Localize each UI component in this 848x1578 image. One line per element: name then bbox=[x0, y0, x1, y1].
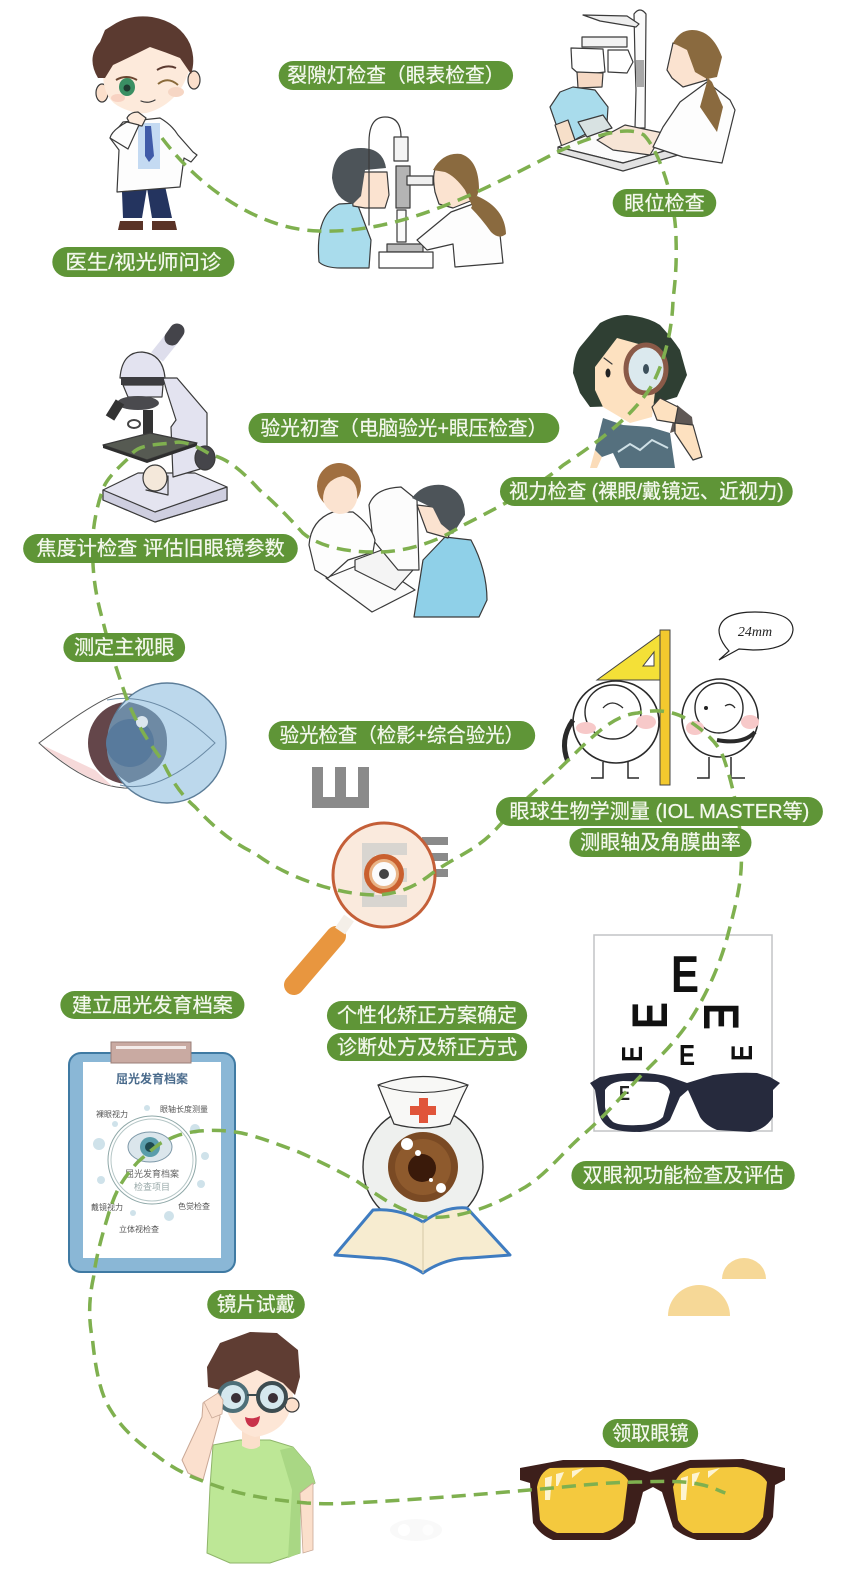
left eye character bbox=[564, 681, 659, 778]
right arm bbox=[300, 1483, 313, 1553]
shoes bbox=[118, 221, 143, 230]
step label: 个性化矫正方案确定 bbox=[327, 1001, 527, 1030]
eye chart board: E bbox=[679, 1040, 695, 1072]
nurse ponytail bbox=[700, 78, 723, 132]
eye chart board bbox=[594, 935, 772, 1131]
patient shirt bbox=[550, 87, 608, 140]
paper items: 色觉检查 bbox=[178, 1201, 210, 1211]
handle bbox=[294, 936, 336, 985]
focus knob bbox=[195, 446, 215, 470]
paper items: 裸眼视力 bbox=[96, 1109, 128, 1119]
blush bbox=[168, 87, 184, 97]
step label: 医生/视光师问诊 bbox=[52, 247, 234, 277]
hair bbox=[207, 1332, 300, 1395]
magnifier bbox=[626, 345, 666, 393]
objectives bbox=[110, 402, 120, 418]
trousers bbox=[122, 172, 172, 218]
patient shirt bbox=[318, 203, 371, 268]
step label: 领取眼镜 bbox=[603, 1419, 698, 1448]
left arm bbox=[590, 450, 602, 468]
eye and nose bbox=[606, 368, 610, 378]
step label: 镜片试戴: 镜片试戴 bbox=[217, 1293, 295, 1316]
paper items: 立体视检查 bbox=[119, 1224, 159, 1234]
illustration: doctor winking bbox=[92, 16, 200, 230]
central rings: 检查项目 bbox=[134, 1181, 170, 1192]
nurse coat bbox=[309, 512, 375, 578]
dashed route connecting all steps bbox=[90, 131, 741, 1504]
eye chart board: E bbox=[726, 1045, 759, 1061]
illustration: magnifier with eye bbox=[294, 823, 435, 985]
table bbox=[558, 130, 685, 163]
step label: 领取眼镜: 领取眼镜 bbox=[612, 1422, 689, 1445]
contact lens bbox=[108, 683, 226, 803]
base bbox=[103, 473, 227, 522]
shirt bbox=[595, 418, 675, 468]
lens highlights bbox=[545, 1468, 584, 1500]
eyeball bbox=[363, 1107, 483, 1227]
hair bbox=[573, 315, 687, 407]
step label: 镜片试戴 bbox=[207, 1290, 305, 1319]
nurse hair bbox=[673, 30, 722, 79]
illustration: eye position examination bbox=[550, 10, 735, 171]
paper items bbox=[91, 1104, 210, 1234]
decoration: sun semicircles bbox=[668, 1258, 766, 1316]
step label: 双眼视功能检查及评估: 双眼视功能检查及评估 bbox=[582, 1164, 784, 1187]
illustration: boy trying lenses bbox=[182, 1332, 315, 1563]
nurse face bbox=[667, 43, 707, 87]
board bbox=[69, 1053, 235, 1272]
central rings bbox=[108, 1116, 196, 1204]
frame bbox=[520, 1459, 785, 1540]
nurse head bbox=[434, 166, 473, 208]
illustration: refraction record clipboard bbox=[69, 1042, 235, 1272]
winking eye bbox=[158, 80, 178, 85]
face bbox=[222, 1360, 293, 1437]
triangle ruler bbox=[597, 633, 662, 680]
patient face and hair bbox=[350, 172, 389, 208]
nosepiece bbox=[117, 396, 159, 410]
lens bbox=[333, 823, 435, 927]
step label: 验光初查: 验光初查（电脑验光+眼压检查） bbox=[261, 417, 547, 440]
eye chart board: E bbox=[693, 1003, 749, 1030]
step label: 验光初查 bbox=[248, 413, 559, 443]
instrument pole bbox=[634, 10, 646, 128]
face bbox=[595, 338, 660, 423]
illustration: measuring eye characters with ruler bbox=[564, 630, 759, 785]
hand bbox=[204, 1393, 223, 1418]
step label: 眼位检查: 眼位检查 bbox=[624, 192, 705, 215]
speech bubble: 24mm: 24mm bbox=[738, 625, 772, 640]
phoropter bbox=[582, 37, 627, 47]
lower lid tint bbox=[42, 745, 112, 786]
icon: grey E chart letter bbox=[422, 837, 448, 877]
mouth bbox=[245, 1416, 260, 1427]
paper items: 眼轴长度测量 bbox=[160, 1104, 208, 1114]
eye chart board: E bbox=[617, 1046, 649, 1062]
lens iris overlap bbox=[107, 702, 167, 783]
eye outline bbox=[39, 694, 215, 788]
eye chart board: E bbox=[671, 946, 699, 1004]
shirt shading bbox=[280, 1447, 315, 1558]
step label: 诊断处方及矫正方式: 诊断处方及矫正方式 bbox=[337, 1036, 517, 1059]
clear left lens bbox=[605, 1081, 670, 1125]
step label: 验光检查: 验光检查（检影+综合验光） bbox=[280, 724, 524, 747]
step label: 测定主视眼: 测定主视眼 bbox=[74, 636, 175, 659]
ears bbox=[96, 84, 108, 102]
nurse cap bbox=[378, 1076, 468, 1128]
eye rings bbox=[364, 854, 404, 894]
decorative dots bbox=[93, 1105, 209, 1221]
shirt bbox=[207, 1440, 315, 1563]
illustration: microscope bbox=[103, 331, 227, 522]
frame bbox=[590, 1073, 780, 1132]
hand on chin bbox=[127, 112, 146, 126]
paper items: 戴镜视力 bbox=[91, 1202, 123, 1212]
head dome bbox=[120, 352, 165, 378]
carousel dots bbox=[390, 1519, 442, 1541]
paper bbox=[83, 1062, 221, 1258]
speech bubble: 24mm bbox=[719, 612, 793, 660]
step label: 建立屈光发育档案 bbox=[60, 991, 244, 1019]
step label: 眼球生物学测量 bbox=[496, 797, 823, 826]
small chart letter in lens: E bbox=[619, 1083, 630, 1105]
patient face bbox=[577, 72, 603, 88]
step label: 眼球生物学测量: 眼球生物学测量 (IOL MASTER等) bbox=[510, 800, 809, 823]
illustration: half-covered glasses bbox=[590, 1073, 780, 1132]
iris bbox=[388, 1132, 458, 1202]
nurse ponytail bbox=[471, 196, 506, 237]
arm bbox=[675, 423, 702, 460]
machine bbox=[369, 487, 419, 570]
icon: grey E chart letter rotated bbox=[312, 767, 369, 808]
tablet bbox=[578, 115, 612, 137]
tie bbox=[145, 126, 154, 162]
table bbox=[326, 560, 415, 612]
shirt bbox=[138, 123, 160, 169]
shirt pattern bbox=[618, 440, 668, 452]
step label: 医生/视光师问诊: 医生/视光师问诊 bbox=[65, 251, 221, 274]
step label: 测眼轴及角膜曲率 bbox=[569, 828, 751, 857]
patient shirt bbox=[414, 537, 487, 617]
neck bbox=[242, 1430, 260, 1449]
illustration: yellow tinted glasses bbox=[520, 1459, 785, 1540]
illustration: slit lamp examination bbox=[318, 117, 506, 268]
nurse coat bbox=[417, 204, 503, 267]
handle bbox=[670, 405, 693, 433]
mirror bbox=[143, 465, 167, 491]
step label: 测眼轴及角膜曲率: 测眼轴及角膜曲率 bbox=[580, 831, 741, 854]
illustration: girl with magnifying glass bbox=[573, 315, 702, 468]
raised sleeve bbox=[110, 122, 139, 149]
illustration: autorefractor pre-check bbox=[309, 463, 487, 617]
ear bbox=[285, 1398, 299, 1412]
step label: 双眼视功能检查及评估 bbox=[571, 1161, 795, 1190]
nurse coat bbox=[653, 82, 735, 163]
step label: 眼位检查 bbox=[613, 189, 716, 217]
paper title: 屈光发育档案 bbox=[116, 1071, 188, 1086]
hair bbox=[92, 16, 193, 78]
vertical ruler bbox=[660, 630, 670, 785]
step label: 焦度计检查 bbox=[23, 534, 298, 563]
hand bbox=[652, 398, 678, 423]
left lens bbox=[537, 1467, 628, 1533]
open book bbox=[335, 1208, 510, 1273]
white coat bbox=[110, 118, 197, 192]
stage bbox=[103, 433, 197, 460]
step label: 裂隙灯检查: 裂隙灯检查（眼表检查） bbox=[287, 64, 505, 87]
face bbox=[103, 40, 190, 113]
step label: 视力检查: 视力检查 (裸眼/戴镜远、近视力) bbox=[509, 480, 784, 503]
patient arm bbox=[555, 120, 575, 147]
eyepiece bbox=[157, 332, 177, 357]
step label: 焦度计检查: 焦度计检查 评估旧眼镜参数 bbox=[36, 537, 285, 560]
instrument arm bbox=[583, 15, 639, 27]
step label: 建立屈光发育档案: 建立屈光发育档案 bbox=[72, 994, 233, 1017]
central rings: 屈光发育档案 bbox=[125, 1168, 179, 1179]
raised arm bbox=[182, 1395, 220, 1480]
clip bbox=[111, 1042, 191, 1063]
glasses bbox=[219, 1383, 247, 1411]
nurse hair and face bbox=[317, 463, 361, 509]
E inside lens bbox=[362, 843, 407, 907]
iris bbox=[88, 702, 168, 784]
nurse hands bbox=[597, 125, 663, 155]
slit lamp instrument bbox=[369, 117, 401, 225]
arm bbox=[163, 378, 207, 477]
right lens bbox=[673, 1467, 767, 1533]
step label: 测定主视眼 bbox=[63, 633, 185, 662]
step label: 个性化矫正方案确定: 个性化矫正方案确定 bbox=[337, 1004, 517, 1027]
patient head and hair bbox=[417, 505, 458, 538]
illustration: eye with contact lens bbox=[39, 683, 226, 803]
right eye character bbox=[682, 679, 759, 778]
illustration: nurse eyeball on book bbox=[335, 1076, 510, 1273]
red cross bbox=[410, 1098, 436, 1123]
eye bbox=[119, 78, 135, 96]
eye chart board: E bbox=[622, 1002, 678, 1029]
